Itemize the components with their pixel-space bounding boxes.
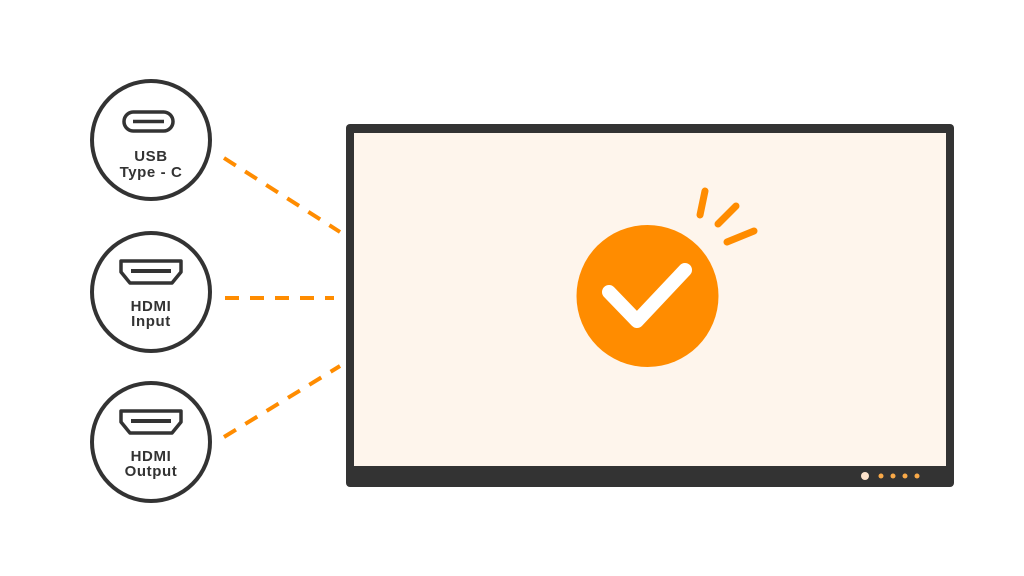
connectors: dashed lines bbox=[224, 158, 340, 437]
label: HDMI Output: HDMI bbox=[131, 448, 171, 465]
label: USB Type-C: Type - C bbox=[120, 164, 182, 181]
icon: check badge bbox=[576, 191, 754, 367]
indicator dots bbox=[861, 472, 920, 480]
icon: hdmi port bbox=[121, 261, 181, 283]
label: HDMI Output: Output bbox=[125, 463, 177, 480]
sparkle rays bbox=[700, 191, 754, 242]
port: HDMI Input bbox=[92, 233, 210, 351]
monitor bbox=[346, 124, 954, 487]
label: HDMI Input: HDMI bbox=[131, 298, 171, 315]
icon: usb-c port bbox=[124, 112, 173, 131]
label: HDMI Input: Input bbox=[131, 313, 171, 330]
port: HDMI Output bbox=[92, 383, 210, 501]
icon: hdmi port bbox=[121, 411, 181, 433]
screen bbox=[354, 133, 946, 466]
port: USB Type-C bbox=[92, 81, 210, 199]
label: USB Type-C: USB bbox=[134, 148, 168, 165]
